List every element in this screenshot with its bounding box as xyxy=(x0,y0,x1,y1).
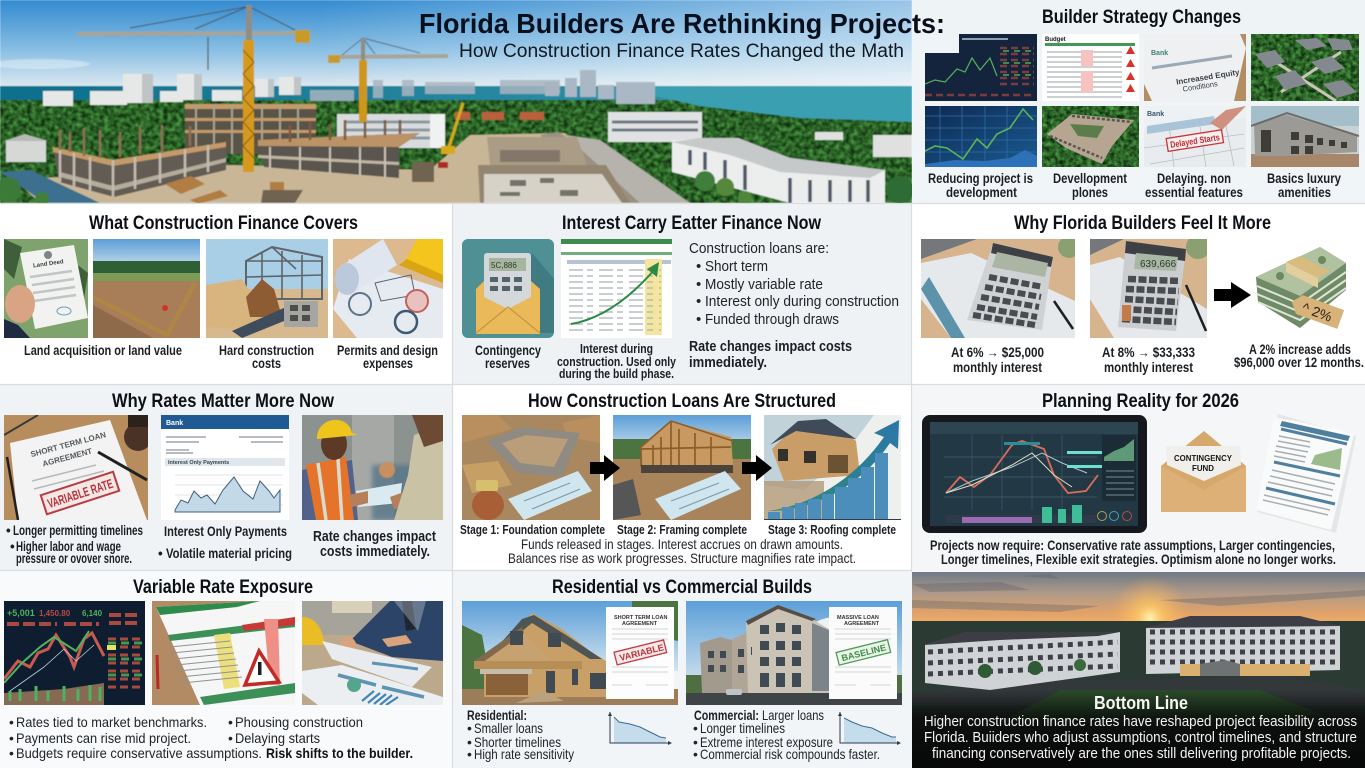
caption: essential features xyxy=(1145,185,1243,200)
image: commercial building with loan document: MASSIVE LOAN xyxy=(837,615,879,621)
text block: loan traits: • xyxy=(696,293,701,310)
image: residential house with loan document xyxy=(462,601,678,705)
image: stage 2 framing xyxy=(613,415,751,520)
skyline towers xyxy=(43,70,655,106)
crane two xyxy=(328,38,448,122)
icon: contingency envelope with calculator xyxy=(462,239,554,338)
image: delayed starts calendar: Bank xyxy=(1147,111,1164,118)
text: commercial list: Extreme interest exposure xyxy=(700,734,833,750)
red roof houses xyxy=(4,112,544,162)
caption: Delaying. non xyxy=(1157,171,1231,186)
heading: Builder Strategy Changes xyxy=(1042,7,1241,28)
text: residential list: Smaller loans xyxy=(474,720,543,736)
image: interest only statement: Bank xyxy=(166,420,183,427)
ocean xyxy=(0,86,912,122)
caption: monthly interest xyxy=(1104,360,1193,375)
image: stock ticker screen: +5,001 xyxy=(7,608,35,618)
image: worker receiving check xyxy=(302,415,443,520)
caption xyxy=(475,343,541,371)
text: commercial list: • xyxy=(693,720,698,736)
caption: monthly interest xyxy=(953,360,1042,375)
caption: expenses xyxy=(363,356,413,371)
image: equity letter xyxy=(1144,34,1246,101)
crane one xyxy=(77,5,310,172)
heading: Residential vs Commercial Builds xyxy=(552,577,812,598)
text block: loan traits: • xyxy=(696,311,701,328)
caption: Hard construction xyxy=(219,343,314,358)
icon: tablet dashboard xyxy=(922,415,1147,533)
image: commercial building with loan document xyxy=(686,601,902,705)
heading: Bottom Line xyxy=(1094,693,1188,713)
image: equity letter: Increased Equity xyxy=(1176,68,1241,87)
caption: Devellopment xyxy=(1053,171,1127,186)
caption: development xyxy=(946,185,1017,200)
image: spreadsheet with warning xyxy=(152,601,295,705)
caption: during the build phase. xyxy=(559,366,674,381)
caption: Interest during xyxy=(580,341,653,356)
text: residential list xyxy=(467,708,574,762)
text: residential list: Shorter timelines xyxy=(474,734,561,750)
image: budget spreadsheet xyxy=(1042,34,1139,101)
subtitle: How Construction Finance Rates Changed the Math xyxy=(459,41,904,62)
heading: How Construction Loans Are Structured xyxy=(528,391,836,412)
structure: upper block xyxy=(185,104,316,154)
panel: variable rate exposure xyxy=(0,571,453,768)
image: commercial building with loan document: BASELINE xyxy=(840,642,887,663)
text: commercial list: Commercial risk compounds faster. xyxy=(700,746,880,762)
image: budget spreadsheet: Budget xyxy=(1045,37,1066,43)
chart: residential declining sparkline xyxy=(608,712,672,745)
panel: planning reality for 2026 xyxy=(912,385,1365,572)
icon: stack of money: ^ 2% xyxy=(1300,299,1334,325)
image: delayed starts calendar xyxy=(1144,106,1246,167)
text: left bullets: pressure or ovover snore. xyxy=(16,551,132,566)
sunset sky xyxy=(912,572,1365,660)
icon: exit strategy report xyxy=(1256,414,1356,533)
heading: Why Florida Builders Feel It More xyxy=(1014,213,1271,234)
text block: loan traits: Funded through draws xyxy=(705,311,839,328)
text: exposure bullets right: Phousing construction xyxy=(235,714,363,730)
icon: contingency fund envelope xyxy=(1161,431,1246,512)
callout: impact: Rate changes impact xyxy=(313,528,436,545)
panel: interest carry xyxy=(453,204,912,384)
image: basic concrete building xyxy=(1251,106,1359,167)
image: stock ticker screen: 1,450.80 xyxy=(39,609,71,618)
text: commercial list xyxy=(693,707,880,762)
image: blueprints and hard hat xyxy=(333,239,443,338)
callout: rate changes: Rate changes impact costs xyxy=(689,338,852,355)
text: residential list: High rate sensitivity xyxy=(474,746,574,762)
image: trading screen xyxy=(925,34,1037,101)
heading: What Construction Finance Covers xyxy=(89,213,358,234)
text: exposure bullets right: • xyxy=(228,730,233,746)
chart: commercial declining sparkline xyxy=(838,712,901,745)
image: residential house with loan document: AGREEMENT xyxy=(622,621,658,627)
image: residential house with loan document: SHORT TERM LOAN xyxy=(614,615,667,621)
image: interest only statement: Interest Only Payments xyxy=(168,460,229,466)
caption xyxy=(1102,345,1195,375)
caption xyxy=(1267,171,1341,200)
panel: why florida builders feel it more xyxy=(912,204,1365,384)
text block: loan traits: Short term xyxy=(705,258,768,275)
text: exposure bullets left: • xyxy=(9,714,14,730)
right apartment building xyxy=(1146,616,1340,676)
icon: contingency fund envelope: CONTINGENCY xyxy=(1174,453,1232,463)
caption xyxy=(951,345,1044,375)
text: exposure bullets right xyxy=(228,714,363,746)
text: left bullets: • xyxy=(10,539,15,554)
sky xyxy=(0,0,912,88)
text: exposure bullets left: Payments can rise mid project. xyxy=(16,730,191,746)
text: residential list: • xyxy=(467,720,472,736)
text: middle bullets: Volatile material pricing xyxy=(166,546,292,561)
text: commercial list: Commercial: xyxy=(694,708,759,723)
panel: bottom line photo xyxy=(912,572,1365,768)
arrow xyxy=(1214,282,1251,308)
heading: Interest Carry Eatter Finance Now xyxy=(562,213,821,234)
text: left bullets: Higher labor and wage xyxy=(16,539,121,554)
image: building materials xyxy=(206,239,328,338)
construction ground xyxy=(0,132,690,206)
text: left bullets: Longer permitting timelines xyxy=(13,523,143,538)
treeline and grounds xyxy=(912,621,1365,722)
image: stage 1 foundation xyxy=(462,415,600,520)
caption: Basics luxury xyxy=(1267,171,1341,186)
icon: contingency fund envelope: FUND xyxy=(1192,463,1214,473)
text block: loan traits: Construction loans are: xyxy=(689,240,829,257)
icon: exit strategy report: FUTURE EXIT STRATEGY xyxy=(1291,419,1346,435)
caption xyxy=(219,343,314,371)
text: exposure bullets left: • xyxy=(9,745,14,761)
text: exposure bullets left: Risk shifts to the builder. xyxy=(266,745,413,761)
caption: Contingency xyxy=(475,343,541,358)
text: residential list: Residential: xyxy=(467,708,527,723)
excavation pits xyxy=(478,137,630,203)
panel: what construction finance covers xyxy=(0,204,453,384)
materials and vehicles xyxy=(165,103,463,204)
image: residential house with loan document: VARIABLE xyxy=(618,642,665,663)
text: exposure bullets left: Rates tied to market benchmarks. xyxy=(16,714,207,730)
panel: residential vs commercial xyxy=(453,571,912,768)
arrow xyxy=(590,455,620,481)
text block: loan traits: Interest only during construction xyxy=(705,293,899,310)
image: delayed starts calendar: Delayed Starts xyxy=(1169,132,1220,150)
structure: left block xyxy=(53,125,226,197)
image: market chart xyxy=(925,106,1037,167)
caption: plones xyxy=(1072,185,1108,200)
text: commercial list: • xyxy=(693,734,698,750)
text: planning requirements xyxy=(930,538,1336,567)
white condos right xyxy=(608,112,914,205)
image: variable rate agreement: VARIABLE RATE xyxy=(46,476,115,511)
icon: stack of money xyxy=(1256,247,1346,329)
image: interest spreadsheet xyxy=(561,239,672,338)
image: interest only statement xyxy=(161,415,289,520)
caption: Stage 3: Roofing complete xyxy=(768,522,896,537)
text block: loan traits: • xyxy=(696,258,701,275)
callout: rate changes: immediately. xyxy=(689,354,767,371)
icon: contingency envelope with calculator: 5C,886 xyxy=(491,261,517,270)
text: exposure bullets left: Budgets require conservative assumptions. xyxy=(16,745,262,761)
image: aerial housing plan xyxy=(1251,34,1359,101)
caption: At 8% → $33,333 xyxy=(1102,345,1195,360)
image: stage 3 roofing with growth arrow xyxy=(764,415,901,520)
caption: construction. Used only xyxy=(557,354,677,369)
image: land lot xyxy=(93,239,200,338)
text: residential list: • xyxy=(467,746,472,762)
text: middle bullets: Interest Only Payments xyxy=(164,524,287,539)
image: variable rate agreement: AGREEMENT xyxy=(41,447,93,469)
panel: builder strategy changes xyxy=(912,0,1365,203)
text: commercial list: Larger loans xyxy=(762,707,824,723)
image: equity letter: Conditions xyxy=(1182,79,1219,94)
heading: Planning Reality for 2026 xyxy=(1042,391,1239,412)
image: calculator at 8 percent: 639,666 xyxy=(1140,259,1177,270)
heading: Variable Rate Exposure xyxy=(133,577,313,598)
image: commercial building with loan document: AGREEMENT xyxy=(844,621,880,627)
image: businessman reviewing plans xyxy=(302,601,443,705)
text: structure summary: Funds released in stages. Interest accrues on drawn amounts. xyxy=(521,536,843,552)
text: exposure bullets left: • xyxy=(9,730,14,746)
structure: right block xyxy=(258,118,420,178)
callout: impact: costs immediately. xyxy=(320,543,430,560)
text: exposure bullets right: Delaying starts xyxy=(235,730,320,746)
image: variable rate agreement xyxy=(4,415,148,520)
caption: reserves xyxy=(485,356,530,371)
image: calculator at 8 percent xyxy=(1090,239,1207,338)
image: land deed xyxy=(4,239,88,338)
text: structure summary xyxy=(508,536,856,566)
panel: why rates matter more now xyxy=(0,385,453,570)
dark caption gradient xyxy=(912,690,1365,768)
white apartment behind site xyxy=(337,114,445,148)
caption: costs xyxy=(252,356,281,371)
image: calculator at 6 percent xyxy=(921,239,1075,338)
caption xyxy=(1234,342,1364,370)
caption: Stage 1: Foundation complete xyxy=(460,522,605,537)
text: middle bullets xyxy=(158,524,292,561)
caption: Land acquisition or land value xyxy=(24,343,182,358)
image: variable rate agreement: SHORT TERM LOAN xyxy=(30,430,107,459)
text block: loan traits xyxy=(689,240,899,328)
caption: Reducing project is xyxy=(928,171,1033,186)
main title: Florida Builders Are Rethinking Projects: xyxy=(419,8,945,39)
callout: impact xyxy=(313,528,436,560)
text: exposure bullets left xyxy=(9,714,413,761)
image: land deed: Land Deed xyxy=(33,259,64,269)
arrow xyxy=(742,455,772,481)
foliage xyxy=(0,86,912,203)
image: stock ticker screen: 6,140 xyxy=(82,609,103,618)
text: commercial list: Longer timelines xyxy=(700,720,785,736)
text: middle bullets: • xyxy=(158,546,163,561)
caption xyxy=(557,341,677,381)
caption: At 6% → $25,000 xyxy=(951,345,1044,360)
text: residential list: • xyxy=(467,734,472,750)
text: exposure bullets right: • xyxy=(228,714,233,730)
text: left bullets xyxy=(6,523,143,566)
caption xyxy=(337,343,438,371)
callout: rate changes xyxy=(689,338,852,371)
image: stock ticker screen xyxy=(4,601,145,705)
text block: loan traits: • xyxy=(696,276,701,293)
panel: hero photo of Florida construction site xyxy=(0,0,914,206)
caption xyxy=(928,171,1033,200)
text block: loan traits: Mostly variable rate xyxy=(705,276,823,293)
caption: Permits and design xyxy=(337,343,438,358)
image: aerial apartment block xyxy=(1042,106,1139,167)
caption xyxy=(1053,171,1127,200)
caption xyxy=(1145,171,1243,200)
caption: Stage 2: Framing complete xyxy=(617,522,747,537)
text: commercial list: • xyxy=(693,746,698,762)
image: equity letter: Bank xyxy=(1151,50,1168,57)
text: conclusion xyxy=(924,713,1357,762)
text: left bullets: • xyxy=(6,523,11,538)
left apartment building xyxy=(925,632,1120,690)
panel: how construction loans are structured xyxy=(453,385,912,570)
heading: Why Rates Matter More Now xyxy=(112,391,334,412)
caption: amenities xyxy=(1278,185,1331,200)
text: structure summary: Balances rise as work progresses. Structure magnifies rate impact. xyxy=(508,550,856,566)
